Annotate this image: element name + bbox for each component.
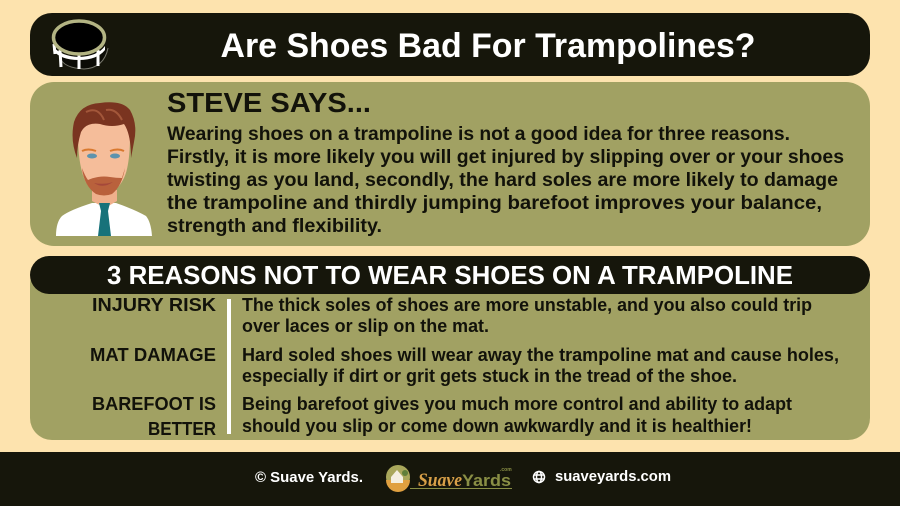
copyright: © Suave Yards.	[255, 469, 363, 486]
logo: Suave Yards: .com	[500, 467, 512, 473]
logo: Suave Yards: Yards	[462, 471, 511, 490]
icon: Steve portrait	[56, 102, 152, 236]
text block: Steve's summary: the trampoline and thirdly jumping barefoot improves your balance,	[167, 193, 822, 214]
panel: Steve says	[30, 82, 870, 246]
icon: trampoline	[53, 21, 108, 69]
logo: Suave Yards	[386, 465, 512, 492]
text block: Steve's summary: Wearing shoes on a trampoline is not a good idea for three reasons.	[167, 124, 790, 145]
reason: barefoot is better: BETTER	[148, 419, 216, 439]
reason: mat damage: MAT DAMAGE	[90, 345, 216, 365]
heading banner: 3 REASONS NOT TO WEAR SHOES ON A TRAMPOLINE	[107, 260, 793, 290]
heading: Steve says: STEVE SAYS...	[167, 87, 371, 118]
footer	[0, 452, 900, 506]
reason: injury risk: The thick soles of shoes are more unstable, and you also could trip	[242, 295, 812, 315]
reason: mat damage: especially if dirt or grit gets stuck in the tread of the shoe.	[242, 366, 737, 386]
text block: Steve's summary: strength and flexibility.	[167, 216, 382, 237]
title banner	[30, 13, 870, 76]
reason: barefoot is better: BAREFOOT IS	[92, 394, 216, 414]
reason: mat damage: Hard soled shoes will wear away the trampoline mat and cause holes,	[242, 345, 839, 365]
reason: mat damage	[90, 345, 839, 386]
divider	[227, 299, 231, 434]
text block: Steve's summary	[167, 124, 844, 237]
website: suaveyards.com	[555, 468, 671, 485]
reason: barefoot is better: Being barefoot gives you much more control and ability to adapt	[242, 394, 792, 414]
reason: injury risk: INJURY RISK	[92, 295, 216, 315]
logo: Suave Yards: Suave	[418, 470, 463, 491]
reason: barefoot is better: should you slip or come down awkwardly and it is healthier!	[242, 416, 752, 436]
panel: three reasons	[30, 256, 870, 440]
reason: injury risk	[92, 295, 812, 336]
icon: globe	[534, 472, 544, 482]
heading banner	[30, 256, 870, 294]
text block: Steve's summary: Firstly, it is more likely you will get injured by slipping over or your shoes	[167, 147, 844, 168]
text block: Steve's summary: twisting as you land, secondly, the hard soles are more likely to damage	[167, 170, 838, 191]
reason: injury risk: over laces or slip on the mat.	[242, 316, 489, 336]
title text: Are Shoes Bad For Trampolines?	[220, 27, 756, 65]
reason: barefoot is better	[92, 394, 792, 439]
